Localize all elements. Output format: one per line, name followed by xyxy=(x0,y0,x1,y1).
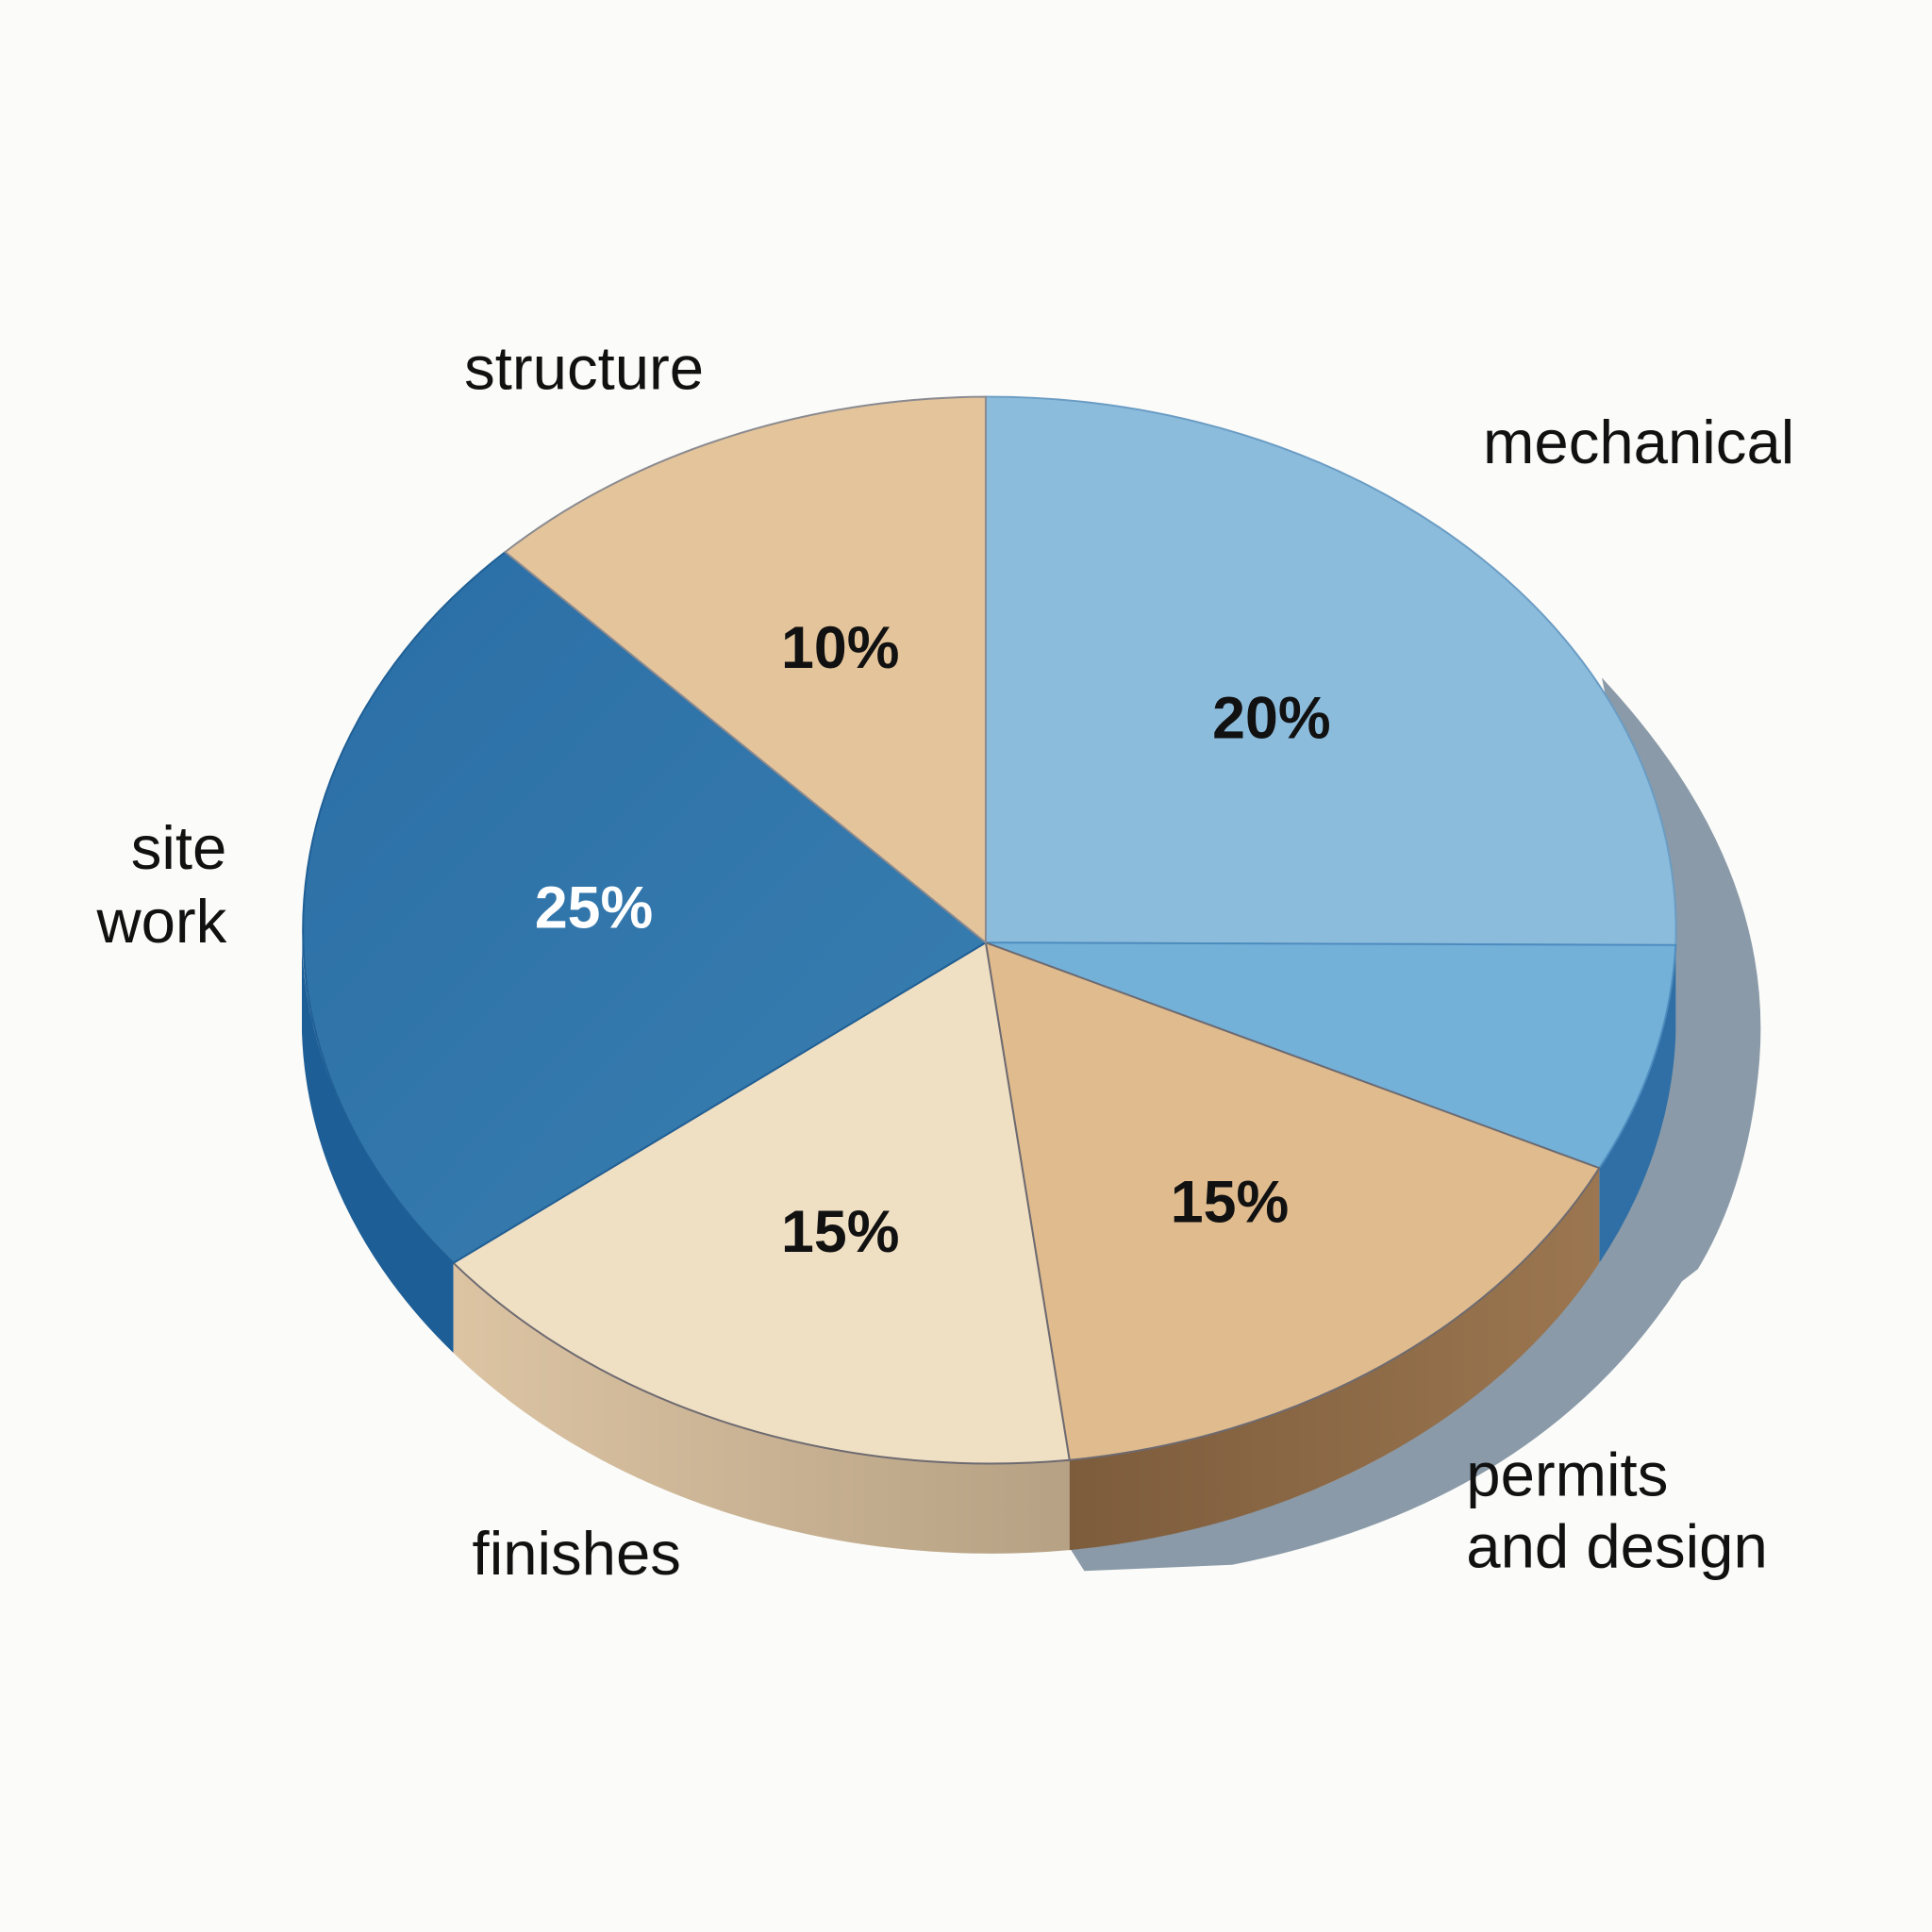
percent: permits: 15% xyxy=(1171,1170,1289,1236)
label: site work: site xyxy=(131,813,226,882)
slice: mechanical extra xyxy=(986,942,1675,1168)
side: permits xyxy=(1070,1168,1599,1550)
shadow xyxy=(1070,677,1760,1571)
label: finishes: finishes xyxy=(473,1519,681,1588)
side: mechanical xyxy=(1599,945,1675,1263)
label: site work: work xyxy=(95,887,227,956)
pie chart xyxy=(302,397,1760,1571)
percent: structure: 10% xyxy=(781,615,900,681)
percent: mechanical: 20% xyxy=(1212,685,1331,751)
percent: site work: 25% xyxy=(535,875,653,941)
label: permits and design: permits xyxy=(1466,1441,1668,1509)
label: mechanical: mechanical xyxy=(1483,408,1794,476)
label: structure: structure xyxy=(464,334,704,403)
slice: site work xyxy=(303,552,986,1263)
slice: structure xyxy=(506,397,986,942)
side: site work xyxy=(302,942,454,1353)
side: finishes xyxy=(454,1263,1070,1554)
slice: mechanical xyxy=(986,397,1676,945)
percent: finishes: 15% xyxy=(781,1199,900,1265)
label: permits and design: and design xyxy=(1466,1511,1768,1580)
slice: permits and design xyxy=(986,942,1599,1460)
slice: finishes xyxy=(454,942,1070,1463)
